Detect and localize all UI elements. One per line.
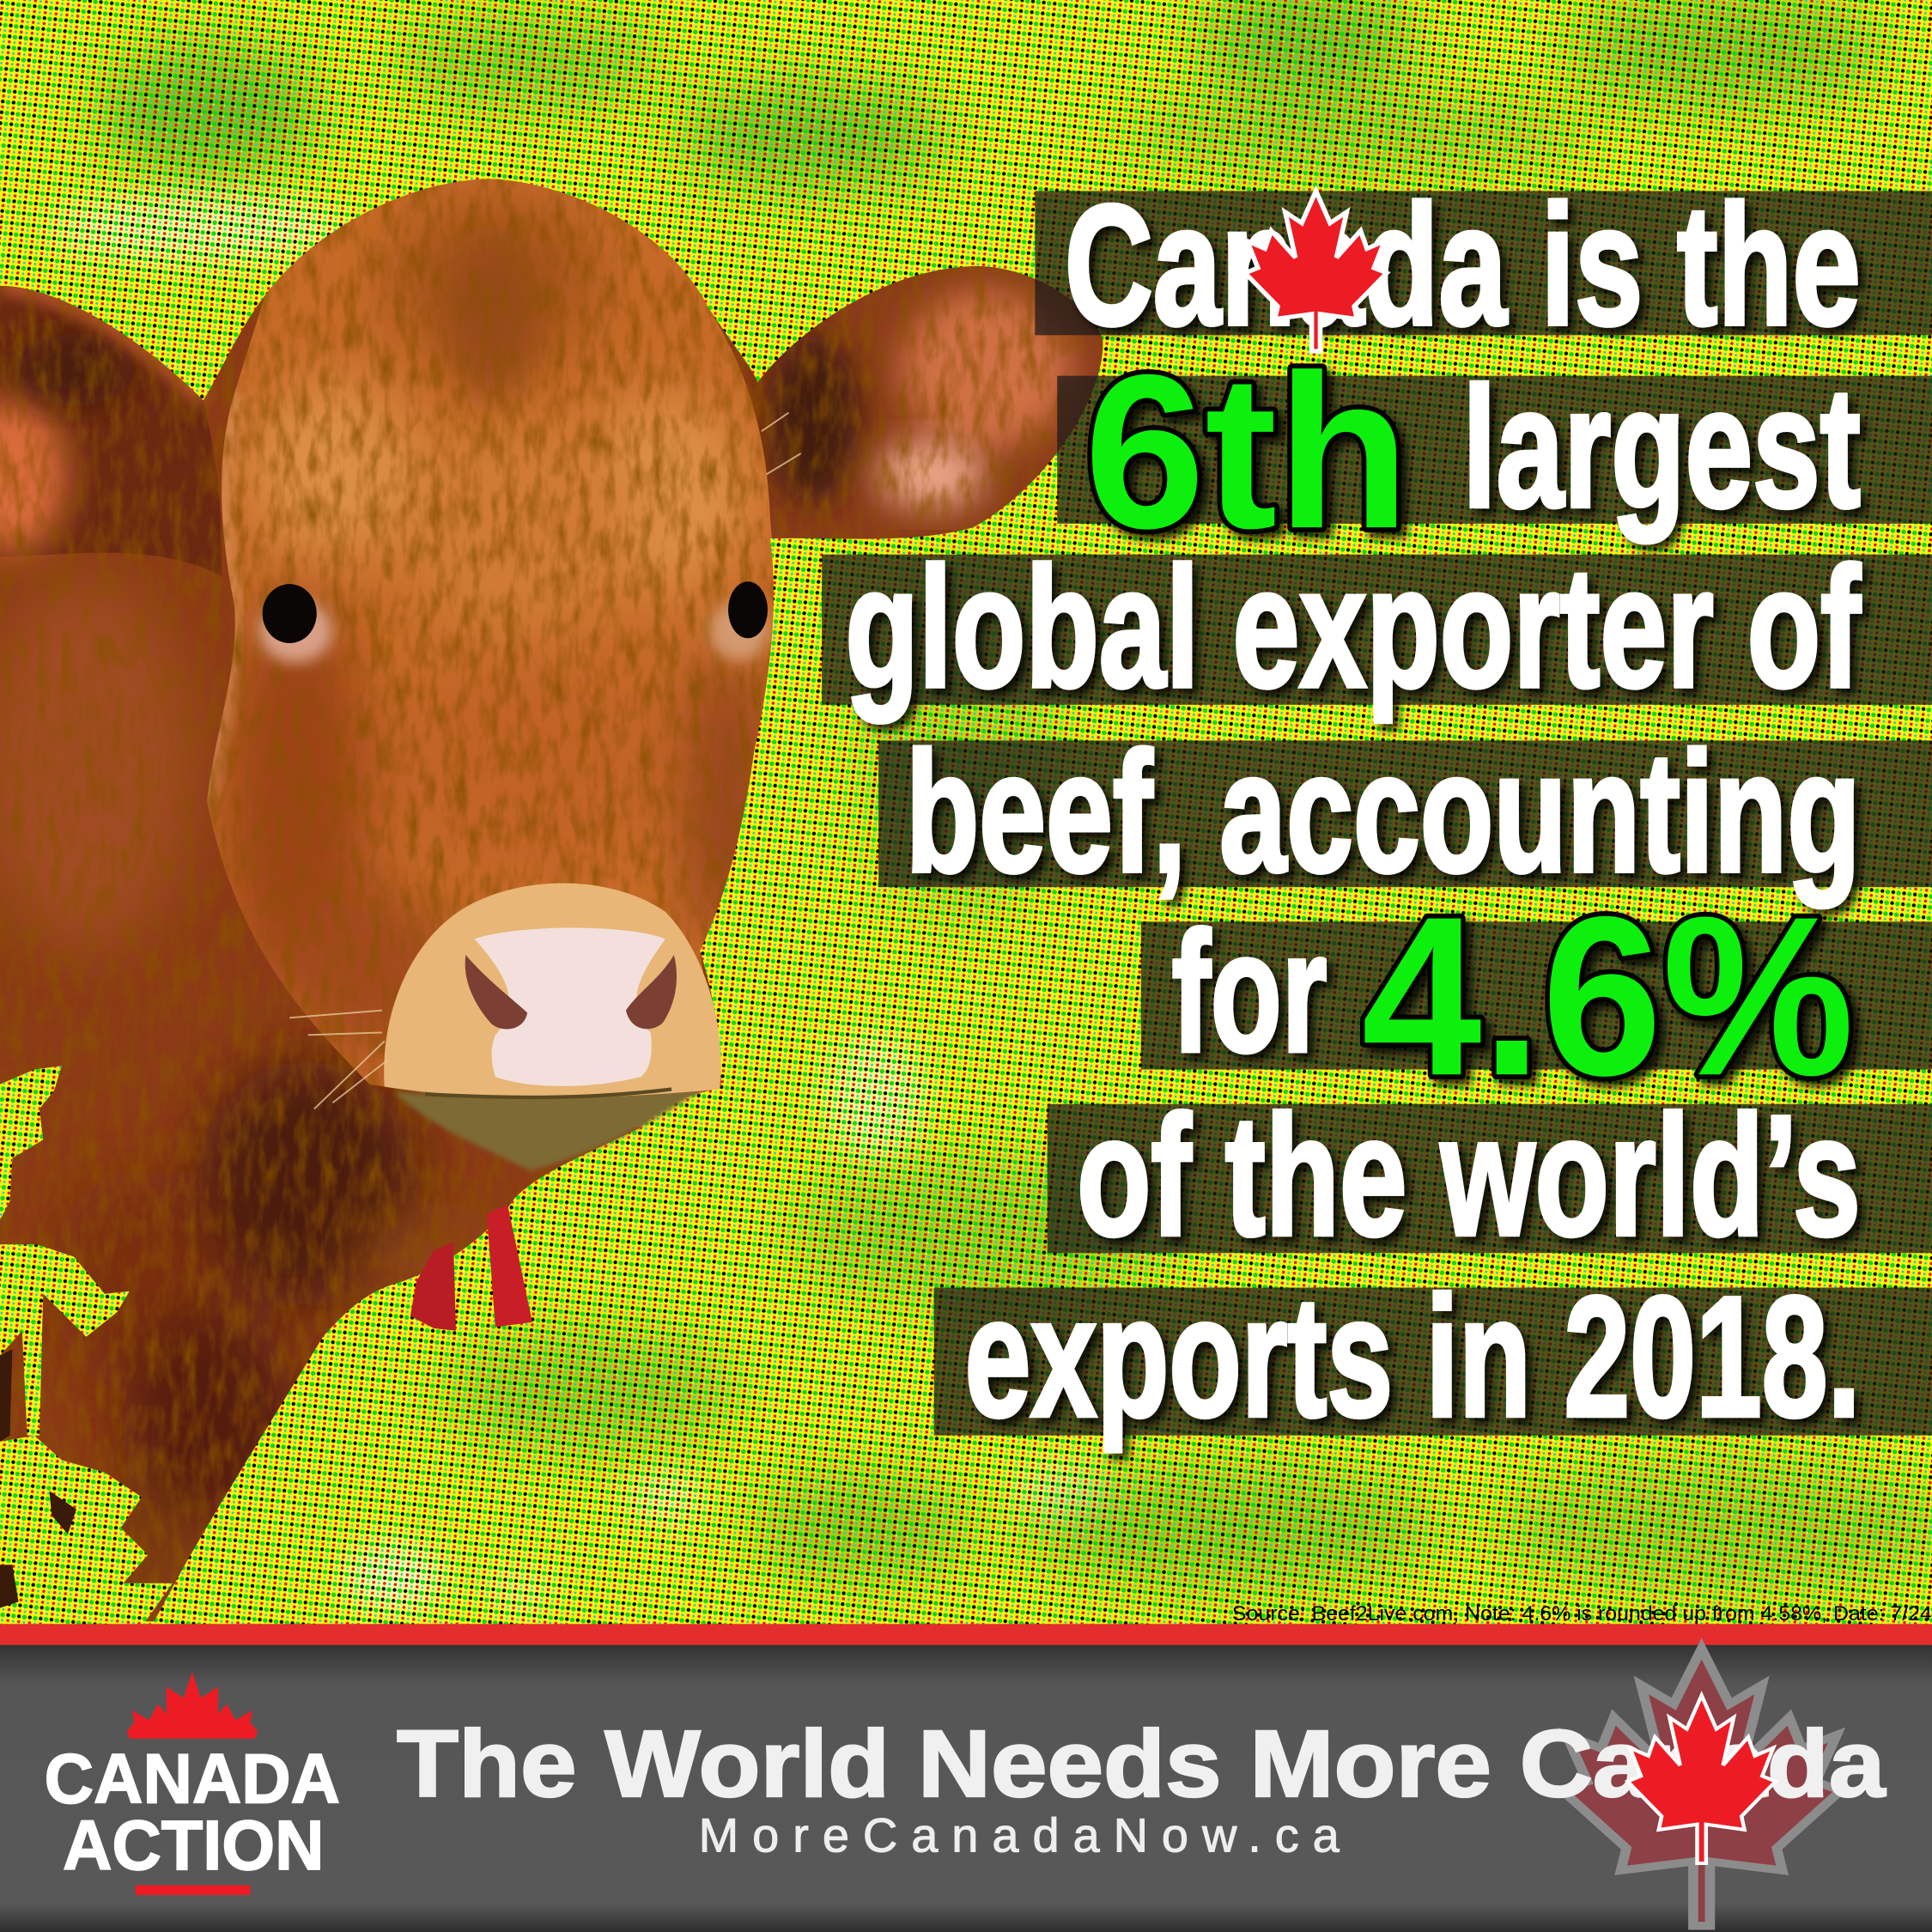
- cow right eye: [710, 581, 769, 660]
- text background bars: [822, 191, 1932, 1436]
- icon: large faded maple leaf: [1563, 1649, 1841, 1926]
- cow muzzle: [384, 883, 721, 1097]
- logo underline: [136, 1885, 250, 1895]
- cow left eye: [258, 584, 332, 663]
- logo leaf crown: [127, 1672, 258, 1739]
- logo word: Action: ACTION: [63, 1807, 324, 1885]
- line 5: 4.6%: 4.6%: [1362, 869, 1855, 1122]
- headline text: [845, 169, 1861, 1453]
- source note: Source: Beef2Live.com, Note: 4.6% is rounded up from 4.58%, Date: 7/24/19: [1232, 1602, 1932, 1625]
- whiskers: [289, 413, 801, 1109]
- cow left ear: [0, 286, 222, 577]
- footer slogan: The World Needs More Canada: [397, 1711, 1886, 1817]
- footer band: [0, 1624, 1932, 1932]
- icon: maple leaf in headline: [1245, 191, 1387, 351]
- icon: small maple leaf in slogan: [1628, 1695, 1776, 1863]
- cow chin: [394, 1084, 708, 1170]
- ear tag: small: [410, 1242, 456, 1331]
- logo word: Canada: CANADA: [45, 1740, 340, 1818]
- cow mouth line: [425, 1089, 671, 1097]
- cow: [0, 173, 1109, 1626]
- line 5: for: for: [1172, 896, 1327, 1088]
- foreground plant: [0, 1066, 173, 1621]
- website url: MoreCanadaNow.ca: [699, 1808, 1340, 1862]
- ear tag: large: [487, 1205, 532, 1327]
- fur texture: [0, 173, 1109, 1626]
- cow neck and body: [0, 246, 788, 1626]
- cow face: [197, 173, 788, 1158]
- cow nose: [465, 928, 677, 1086]
- line 2: 6th: 6th: [1084, 330, 1410, 574]
- Canada Action logo: [45, 1672, 340, 1895]
- cow right ear: [757, 266, 1103, 539]
